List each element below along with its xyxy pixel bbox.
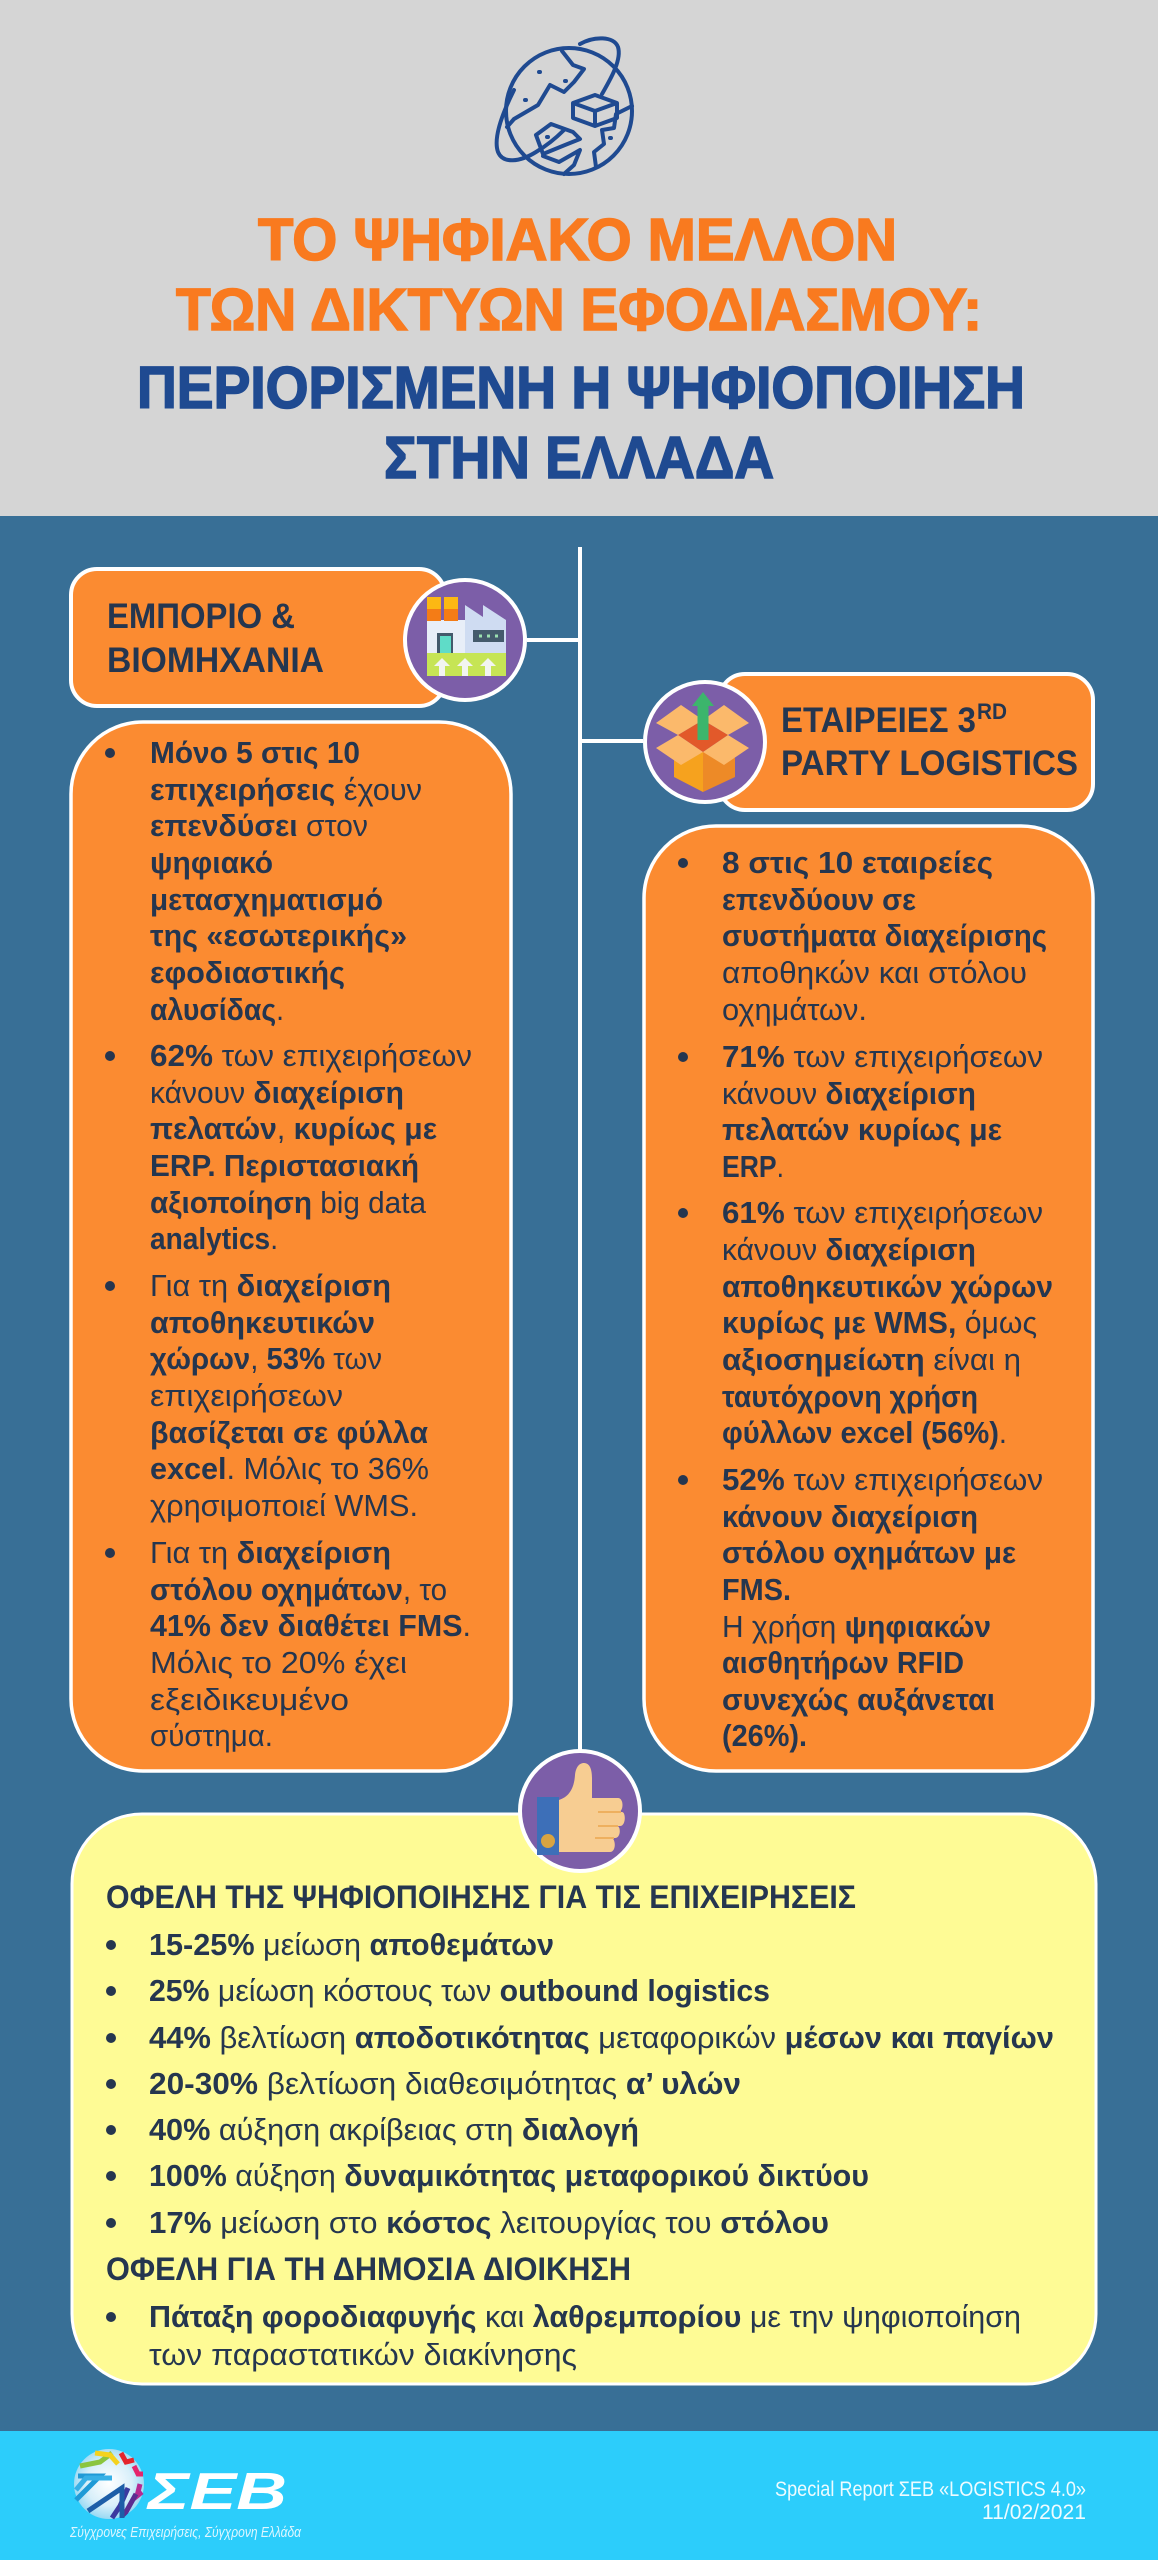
bullet item: 71%: κάνουν διαχείριση [722,1076,976,1111]
bullet item: 52%: αισθητήρων RFID [722,1645,964,1680]
bullet item: 8 in 10: συστήματα διαχείρισης [722,918,1047,953]
list: public administration benefits: Πάταξη φοροδιαφυγής και λαθρεμπορίου με την ψηφιοποίηση [149,2299,1021,2334]
panel: heading Εταιρείες 3rd party logistics: PARTY LOGISTICS [781,744,1078,783]
icon: open box [645,682,765,802]
bullet item: 5 in 10 [105,735,422,1027]
bullet item: 62%: κάνουν διαχείριση [150,1075,404,1110]
panel: heading Εμπόριο & Βιομηχανία: ΕΜΠΟΡΙΟ & [107,597,295,636]
panel: heading Εμπόριο & Βιομηχανία [71,569,445,706]
bullet item: 52%: Η χρήση ψηφιακών [722,1609,991,1644]
panel: heading Εταιρείες 3rd party logistics: RD [977,699,1007,724]
source note: 11/02/2021 [982,2501,1086,2524]
bullet item: 62%: πελατών, κυρίως με [150,1111,437,1146]
list: business benefits [106,1927,1054,2240]
bullet item: warehouses [105,1268,429,1523]
bullet item: 8 in 10: 8 στις 10 εταιρείες [722,845,993,880]
bullet item: 61%: αξιοσημείωτη είναι η [722,1342,1021,1377]
bullet item: 61%: 61% των επιχειρήσεων [722,1195,1043,1230]
list: business benefits: 15-25% μείωση αποθεμάτων [149,1927,554,1962]
bullet item: 62%: 62% των επιχειρήσεων [150,1038,472,1073]
list: business benefits: 20-30% βελτίωση διαθεσιμότητας α’ υλών [149,2066,741,2101]
bullet item: 8 in 10: αποθηκών και στόλου [722,955,1027,990]
logo: tagline: Σύγχρονες Επιχειρήσεις, Σύγχρονη Ελλάδα [69,2524,301,2541]
bullet item: warehouses: χρησιμοποιεί WMS. [150,1488,418,1523]
bullet item: warehouses: επιχειρήσεων [150,1378,343,1413]
title: orange lines: ΤΩΝ ΔΙΚΤΥΩΝ ΕΦΟΔΙΑΣΜΟΥ: [176,277,982,343]
panel: benefits [72,1814,1096,2384]
panel: footer [0,2431,1158,2560]
list: business benefits: 44% βελτίωση αποδοτικότητας μεταφορικών μέσων και παγίων [149,2020,1054,2055]
bullet item: 61%: φύλλων excel (56%). [722,1415,1007,1450]
bullet item: 5 in 10: αλυσίδας. [150,992,284,1027]
panel: heading Εταιρείες 3rd party logistics [719,674,1093,810]
bullet item: 62%: ERP. Περιστασιακή [150,1148,419,1183]
panel: blue background band [0,516,1158,2432]
heading: business benefits: ΟΦΕΛΗ ΤΗΣ ΨΗΦΙΟΠΟΙΗΣΗΣ ΓΙΑ ΤΙΣ ΕΠΙΧΕΙΡΗΣΕΙΣ [106,1879,856,1915]
bullet item: 52% [678,1462,1043,1753]
bullet item: 8 in 10 [678,845,1047,1027]
bullet item: fleet [105,1535,471,1753]
bullet item: 71%: 71% των επιχειρήσεων [722,1039,1043,1074]
bullet item: 5 in 10: Μόνο 5 στις 10 [150,735,360,770]
bullet item: 5 in 10: εφοδιαστικής [150,955,345,990]
bullet item: 5 in 10: ψηφιακό [150,845,273,880]
bullet item: warehouses: χώρων, 53% των [150,1341,382,1376]
bullet item: fleet: Μόλις το 20% έχει [150,1645,407,1680]
icon: thumbs up [520,1751,640,1871]
panel: heading Εμπόριο & Βιομηχανία: ΒΙΟΜΗΧΑΝΙΑ [107,641,324,680]
bullet item: 52%: συνεχώς αυξάνεται [722,1682,995,1717]
bullet item: 52%: FMS. [722,1572,791,1607]
logo: wordmark: ΣΕΒ [145,2463,287,2521]
bullet item: 62%: analytics. [150,1221,278,1256]
connector lines [527,547,643,1760]
panel: header [0,0,1158,516]
bullet item: warehouses: Για τη διαχείριση [150,1268,391,1303]
list: business benefits: 100% αύξηση δυναμικότητας μεταφορικού δικτύου [149,2158,869,2193]
bullet item: 52%: 52% των επιχειρήσεων [722,1462,1043,1497]
panel: heading Εταιρείες 3rd party logistics: ΕΤΑΙΡΕΙΕΣ 3 [781,701,976,740]
title: orange lines [176,207,982,343]
bullet item: 61%: αποθηκευτικών χώρων [722,1269,1053,1304]
title: navy lines [137,355,1025,491]
list: business benefits: 17% μείωση στο κόστος λειτουργίας του στόλου [149,2205,829,2240]
bullet item: 61% [678,1195,1053,1450]
icon: globe with parcel [497,38,632,174]
bullet item: warehouses: βασίζεται σε φύλλα [150,1415,428,1450]
bullet item: 61%: ταυτόχρονη χρήση [722,1379,978,1414]
panel: Εμπόριο & Βιομηχανία list [71,722,511,1771]
bullet item: warehouses: excel. Μόλις το 36% [150,1451,429,1486]
bullet item: 71%: πελατών κυρίως με [722,1112,1002,1147]
bullet item: 52%: (26%). [722,1718,807,1753]
list: public administration benefits: των παραστατικών διακίνησης [149,2337,577,2372]
icon: factory [405,580,525,700]
bullet item: 52%: στόλου οχημάτων με [722,1535,1016,1570]
bullet item: 8 in 10: επενδύουν σε [722,882,916,917]
bullet item: fleet: 41% δεν διαθέτει FMS. [150,1608,471,1643]
title: navy lines: ΠΕΡΙΟΡΙΣΜΕΝΗ Η ΨΗΦΙΟΠΟΙΗΣΗ [137,355,1025,421]
bullet item: 5 in 10: επιχειρήσεις έχουν [150,772,422,807]
bullet item: 5 in 10: μετασχηματισμό [150,882,383,917]
list: public administration benefits [106,2299,1021,2372]
list: business benefits: 25% μείωση κόστους των outbound logistics [149,1973,770,2008]
bullet item: fleet: εξειδικευμένο [150,1682,349,1717]
bullet item: 62% [105,1038,472,1256]
bullet item: 61%: κυρίως με WMS, όμως [722,1305,1037,1340]
bullet item: 8 in 10: οχημάτων. [722,992,867,1027]
bullet item: 5 in 10: επενδύσει στον [150,808,368,843]
bullet item: fleet: Για τη διαχείριση [150,1535,391,1570]
bullet item: 61%: κάνουν διαχείριση [722,1232,976,1267]
bullet item: 71% [678,1039,1043,1184]
source note [775,2478,1086,2524]
panel: 3PL list [644,826,1093,1771]
bullet item: 52%: κάνουν διαχείριση [722,1499,978,1534]
bullet item: warehouses: αποθηκευτικών [150,1305,375,1340]
bullet item: 71%: ERP. [722,1149,784,1184]
title: orange lines: ΤΟ ΨΗΦΙΑΚΟ ΜΕΛΛΟΝ [258,207,897,273]
bullet item: 5 in 10: της «εσωτερικής» [150,918,407,953]
bullet item: 62%: αξιοποίηση big data [150,1185,427,1220]
heading: public administration benefits: ΟΦΕΛΗ ΓΙΑ ΤΗ ΔΗΜΟΣΙΑ ΔΙΟΙΚΗΣΗ [106,2251,631,2287]
logo: globe [74,2449,144,2519]
list: business benefits: 40% αύξηση ακρίβειας στη διαλογή [149,2112,639,2147]
title: navy lines: ΣΤΗΝ ΕΛΛΑΔΑ [384,425,774,491]
bullet item: fleet: στόλου οχημάτων, το [150,1572,447,1607]
bullet item: fleet: σύστημα. [150,1718,273,1753]
source note: Special Report ΣΕΒ «LOGISTICS 4.0» [775,2478,1086,2501]
